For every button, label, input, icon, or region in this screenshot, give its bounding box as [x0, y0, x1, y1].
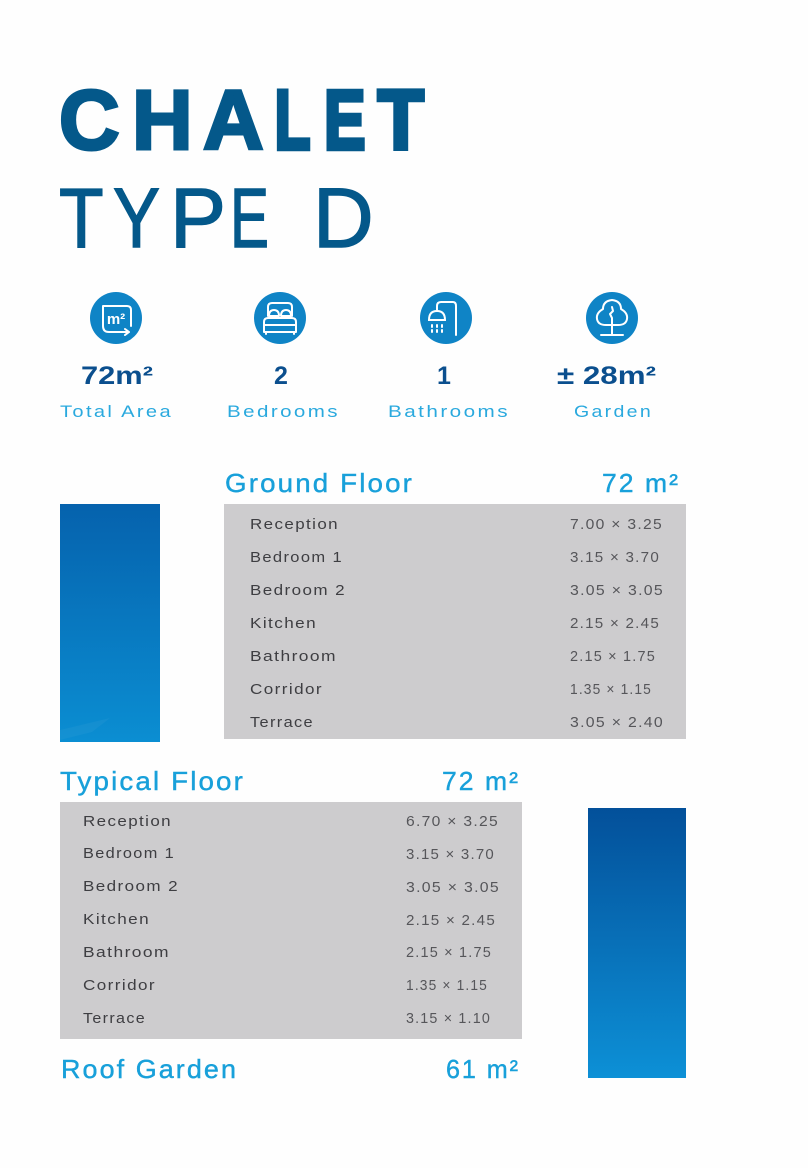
panel: ground floor rooms: Reception: [250, 517, 339, 533]
heading: typical floor: 72 m²: [442, 766, 520, 796]
panel: typical floor rooms: 1.35 × 1.15: [406, 978, 488, 994]
stat: bathrooms: Bathrooms: [388, 402, 510, 421]
icon: area: m²: [107, 311, 125, 328]
heading: typical floor: Typical Floor: [60, 766, 245, 796]
panel: typical floor rooms: Terrace: [83, 1011, 146, 1027]
panel: typical floor rooms: Bedroom 2: [83, 879, 179, 895]
panel: typical floor rooms: 2.15 × 1.75: [406, 945, 492, 961]
stat: bedrooms: Bedrooms: [227, 402, 340, 421]
stat: bedrooms: [227, 292, 340, 421]
icon: shower: [420, 292, 472, 344]
panel: ground floor rooms: Bedroom 1: [250, 550, 343, 566]
panel: ground floor rooms: 3.05 × 2.40: [570, 715, 664, 731]
heading: roof garden: 61 m²: [446, 1054, 520, 1084]
title: H: [132, 73, 193, 167]
title: E: [324, 73, 366, 167]
title: Y: [113, 171, 160, 265]
title: T: [378, 73, 424, 167]
heading: ground floor: 72 m²: [602, 468, 680, 498]
panel: typical floor rooms: Corridor: [83, 978, 156, 994]
stat: total area: Total Area: [60, 402, 173, 421]
panel: ground floor rooms: Kitchen: [250, 616, 317, 632]
heading: ground floor: Ground Floor: [225, 468, 414, 498]
title: P: [170, 171, 226, 265]
panel: ground floor rooms: Corridor: [250, 682, 323, 698]
panel: ground floor rooms: 2.15 × 1.75: [570, 649, 656, 665]
panel: ground floor rooms: 1.35 × 1.15: [570, 682, 652, 698]
panel: typical floor rooms: Kitchen: [83, 912, 150, 928]
panel: ground floor rooms: Bedroom 2: [250, 583, 346, 599]
stat: total area: [60, 292, 173, 421]
panel: typical floor rooms: Bathroom: [83, 945, 170, 961]
heading: roof garden: Roof Garden: [61, 1054, 238, 1084]
panel: typical floor rooms: 6.70 × 3.25: [406, 814, 499, 830]
title: T: [59, 171, 104, 265]
icon: bed: [254, 292, 306, 344]
stat: bedrooms: 2: [274, 362, 288, 390]
panel: typical floor rooms: Reception: [83, 814, 172, 830]
icon: tree: [586, 292, 638, 344]
title: [59, 73, 424, 265]
bar: ground floor: [60, 504, 160, 742]
title: C: [59, 73, 120, 167]
stat: garden: [557, 292, 656, 421]
panel: typical floor rooms: 2.15 × 2.45: [406, 913, 496, 929]
heading: roof garden: [61, 1054, 520, 1084]
panel: typical floor rooms: [60, 802, 522, 1039]
bar: typical floor: [588, 808, 686, 1078]
stat: bathrooms: 1: [437, 362, 451, 390]
panel: typical floor rooms: 3.15 × 3.70: [406, 847, 495, 863]
panel: typical floor rooms: 3.15 × 1.10: [406, 1011, 491, 1027]
panel: ground floor rooms: 3.05 × 3.05: [570, 583, 664, 599]
heading: typical floor: [60, 766, 520, 796]
panel: ground floor rooms: Bathroom: [250, 649, 337, 665]
panel: ground floor rooms: [224, 504, 686, 739]
stat: garden: Garden: [574, 402, 653, 421]
panel: ground floor rooms: 2.15 × 2.45: [570, 616, 660, 632]
heading: ground floor: [225, 468, 680, 498]
panel: ground floor rooms: 3.15 × 3.70: [570, 550, 660, 566]
title: L: [274, 73, 310, 167]
title: E: [230, 171, 269, 265]
panel: ground floor rooms: Terrace: [250, 715, 314, 731]
title: A: [203, 73, 264, 167]
panel: typical floor rooms: Bedroom 1: [83, 846, 175, 862]
stat: bathrooms: [388, 292, 510, 421]
panel: typical floor rooms: 3.05 × 3.05: [406, 880, 500, 896]
panel: ground floor rooms: 7.00 × 3.25: [570, 517, 663, 533]
title: D: [313, 171, 374, 265]
stat: garden: ± 28m²: [557, 362, 656, 390]
stat: total area: 72m²: [81, 362, 153, 390]
